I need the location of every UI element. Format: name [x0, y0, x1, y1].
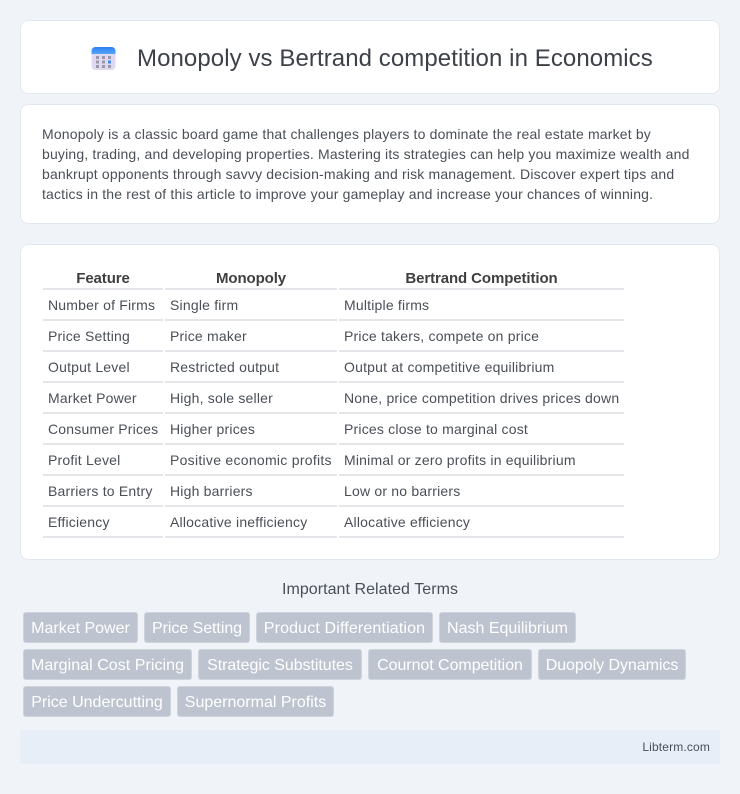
- related terms tags: [23, 612, 686, 717]
- tag: Strategic Substitutes: [207, 657, 353, 674]
- header: Monopoly: Monopoly: [216, 270, 286, 287]
- row: Barriers to Entry: Low or no barriers: [344, 483, 460, 499]
- row: Efficiency: [48, 514, 470, 530]
- tag: Marginal Cost Pricing: [31, 657, 184, 674]
- row: Efficiency: Allocative inefficiency: [170, 514, 307, 530]
- intro text: bankrupt opponents through savvy decision-making and risk management. Discover expert tips and: [42, 166, 674, 182]
- row: Number of Firms: [48, 297, 429, 313]
- tag: [198, 649, 362, 680]
- header: Bertrand Competition: Bertrand Competition: [405, 270, 558, 287]
- row: Profit Level: Positive economic profits: [170, 452, 332, 468]
- row: Efficiency: Allocative efficiency: [344, 514, 470, 530]
- footer bar: [20, 730, 720, 764]
- table: [43, 270, 624, 538]
- tag: Nash Equilibrium: [447, 620, 568, 637]
- row: Price Setting: [48, 328, 539, 344]
- tag: Supernormal Profits: [185, 694, 326, 711]
- row: Consumer Prices: [48, 421, 528, 437]
- tag: Duopoly Dynamics: [546, 657, 678, 674]
- row: Output Level: Restricted output: [170, 359, 279, 375]
- row: Output Level: Output Level: [48, 359, 130, 375]
- row: Consumer Prices: Consumer Prices: [48, 421, 158, 437]
- row: Consumer Prices: Prices close to marginal cost: [344, 421, 528, 437]
- tag: [256, 612, 433, 643]
- row: Number of Firms: Number of Firms: [48, 297, 155, 313]
- header panel: [20, 20, 720, 94]
- intro text: Monopoly is a classic board game that challenges players to dominate the real estate market by: [42, 126, 651, 142]
- row: Profit Level: Minimal or zero profits in equilibrium: [344, 452, 576, 468]
- row: Barriers to Entry: Barriers to Entry: [48, 483, 153, 499]
- intro text: [42, 126, 690, 202]
- row: Market Power: Market Power: [48, 390, 137, 406]
- row: Output Level: Output at competitive equilibrium: [344, 359, 554, 375]
- row: Consumer Prices: Higher prices: [170, 421, 255, 437]
- comparison table panel: [20, 244, 720, 560]
- tag: Price Setting: [152, 620, 242, 637]
- row: Output Level: [48, 359, 554, 375]
- tag: Market Power: [31, 620, 130, 637]
- intro panel: [20, 104, 720, 224]
- intro text: buying, trading, and developing properties. Mastering its strategies can help you maximize wealth and: [42, 146, 690, 162]
- row: Efficiency: Efficiency: [48, 514, 110, 530]
- tag: [23, 649, 192, 680]
- tag: Cournot Competition: [377, 657, 523, 674]
- row: Price Setting: Price takers, compete on price: [344, 328, 539, 344]
- row: Barriers to Entry: [48, 483, 460, 499]
- tag: [23, 612, 138, 643]
- tag: Price Undercutting: [31, 694, 163, 711]
- footer text: Libterm.com: Libterm.com: [642, 740, 710, 754]
- tag: Product Differentiation: [264, 620, 425, 637]
- tag: [439, 612, 576, 643]
- title: Monopoly vs Bertrand competition in Economics: [137, 45, 653, 72]
- row: Number of Firms: Multiple firms: [344, 297, 429, 313]
- tag: [368, 649, 532, 680]
- row: Barriers to Entry: High barriers: [170, 483, 253, 499]
- tag: [144, 612, 250, 643]
- row: Number of Firms: Single firm: [170, 297, 238, 313]
- row: Price Setting: Price maker: [170, 328, 247, 344]
- related terms heading: Important Related Terms: [282, 581, 458, 598]
- header: Feature: Feature: [76, 270, 130, 287]
- intro text: tactics in the rest of this article to improve your gameplay and increase your chances of winning.: [42, 186, 653, 202]
- tag: [538, 649, 686, 680]
- row: Price Setting: Price Setting: [48, 328, 130, 344]
- tag: [23, 686, 171, 717]
- row: Market Power: None, price competition drives prices down: [344, 390, 619, 406]
- row: Profit Level: Profit Level: [48, 452, 120, 468]
- row: Market Power: High, sole seller: [170, 390, 273, 406]
- row: Profit Level: [48, 452, 576, 468]
- row: Market Power: [48, 390, 619, 406]
- tag: [177, 686, 334, 717]
- icon: calendar: [92, 47, 116, 70]
